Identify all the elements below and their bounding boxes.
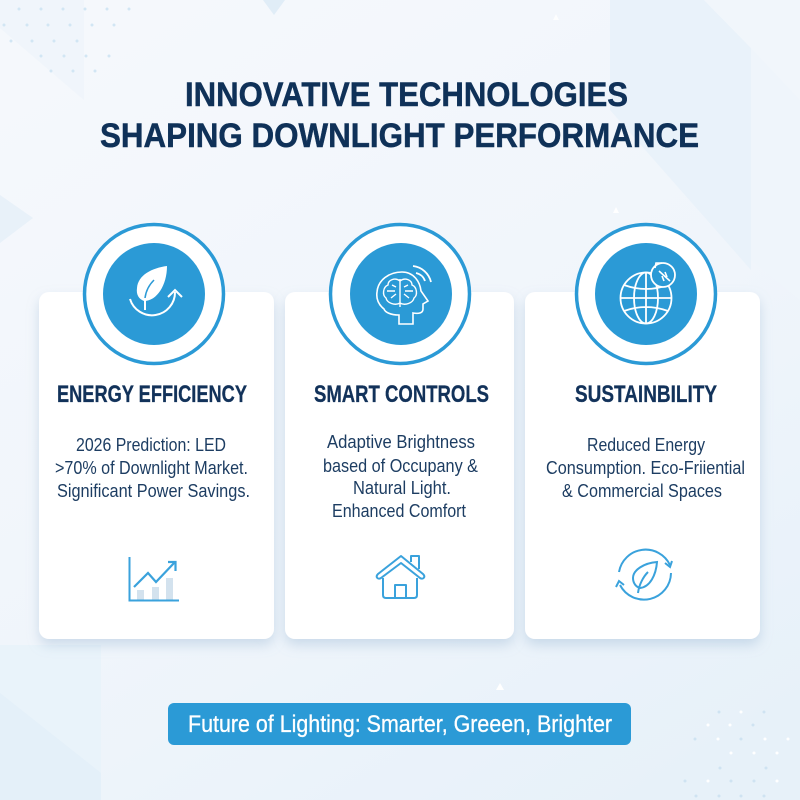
heading: ENERGY EFFICIENCY [57, 381, 247, 408]
body text: based of Occupany & [323, 456, 478, 476]
icon: leaf in recycle arrows [616, 550, 672, 600]
body text [323, 432, 478, 521]
body text: & Commercial Spaces [562, 481, 722, 501]
body text: >70% of Downlight Market. [55, 458, 248, 478]
icon: head with brain and signal [330, 224, 470, 364]
card background [39, 292, 274, 639]
panel: energy efficiency [39, 224, 274, 639]
banner: Future of Lighting: Smarter, Greeen, Brighter [188, 711, 612, 738]
panel: smart controls [285, 224, 514, 639]
heading: SMART CONTROLS [314, 381, 489, 408]
icon: globe with leaf [576, 224, 716, 364]
body text: Significant Power Savings. [57, 481, 250, 501]
banner [168, 703, 631, 745]
panel: sustainability [525, 224, 760, 639]
icon: leaf with circular arrow [84, 224, 224, 364]
body text [546, 435, 745, 501]
body text: Natural Light. [353, 478, 451, 498]
body text [55, 435, 250, 501]
body text: Enhanced Comfort [332, 501, 466, 521]
icon: house [377, 556, 424, 598]
body text: Consumption. Eco-Friiential [546, 458, 745, 478]
title: INNOVATIVE TECHNOLOGIES [185, 76, 628, 114]
card background [525, 292, 760, 639]
body text: Reduced Energy [587, 435, 705, 455]
body text: Adaptive Brightness [327, 432, 475, 452]
title: SHAPING DOWNLIGHT PERFORMANCE [100, 117, 699, 155]
heading: SUSTAINBILITY [575, 381, 717, 408]
icon: growth chart [130, 557, 179, 600]
body text: 2026 Prediction: LED [76, 435, 226, 455]
title [100, 76, 699, 155]
card background [285, 292, 514, 639]
